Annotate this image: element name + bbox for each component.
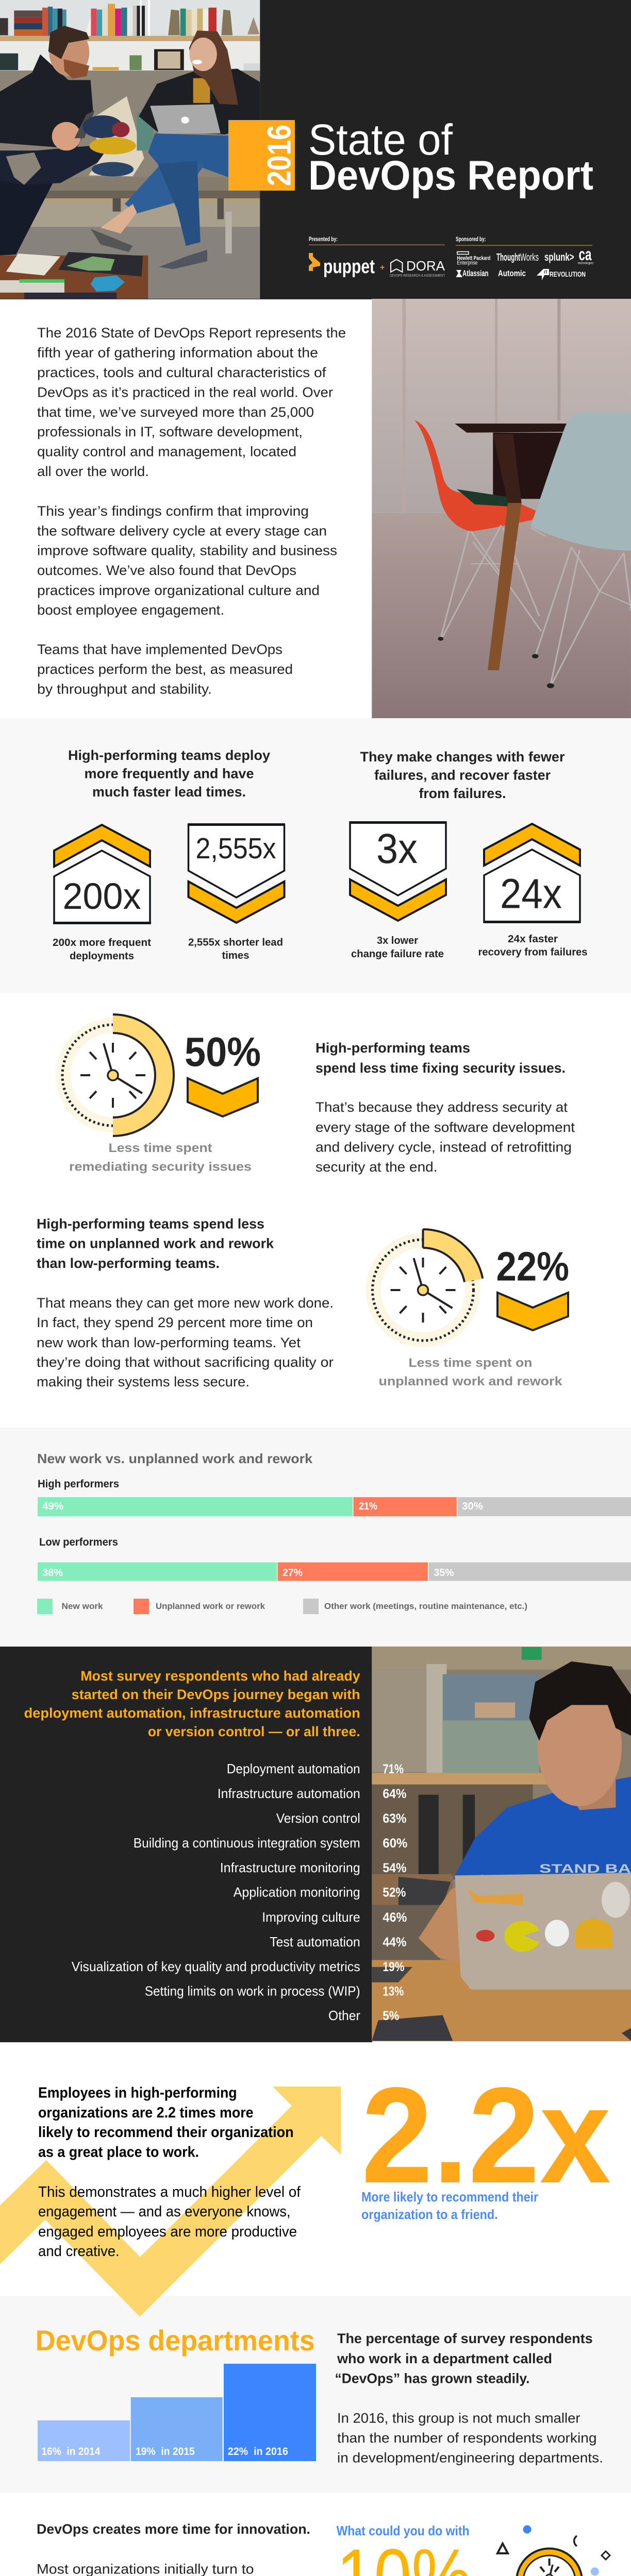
photo: engineer at laptop [372, 1647, 631, 2041]
list: percentages: 44% [383, 1935, 406, 1950]
intro text: practices, tools and cultural characteristics of [37, 365, 326, 380]
logo: puppet: puppet [323, 256, 375, 278]
panel: security [56, 1014, 575, 1175]
photo: chairs and table [372, 299, 631, 718]
text: engagement [38, 2085, 301, 2260]
sponsor logos: Enterprise [457, 260, 477, 266]
sponsor logos: Sponsored by: [456, 235, 486, 243]
title: State of [308, 115, 453, 164]
intro text: outcomes. We’ve also found that DevOps [37, 563, 296, 578]
text: unplanned work: making their systems less secure. [37, 1374, 250, 1389]
presented by logos [309, 235, 445, 278]
panel: DevOps journey [0, 1647, 631, 2042]
list: practices: Other [328, 2008, 360, 2023]
heading: fewer failures: from failures. [419, 786, 506, 801]
list: percentages: 54% [383, 1861, 406, 1875]
text: innovation [37, 2521, 310, 2576]
intro text: that time, we’ve surveyed more than 25,000 [37, 404, 314, 420]
captions: 200x more frequent [53, 937, 151, 948]
text: unplanned work: That means they can get more new work done. [37, 1295, 334, 1311]
logo: DORA: DORA [406, 258, 445, 274]
photo: two colleagues on a sofa [0, 0, 260, 299]
chart title: New work vs. unplanned work and rework [37, 1451, 313, 1466]
text: unplanned work: High-performing teams spend less [37, 1216, 264, 1231]
heading: Most survey respondents who had already [80, 1668, 360, 1684]
text: departments: In 2016, this group is not much smaller [337, 2410, 580, 2426]
legend: Other work (meetings, routine maintenance, etc.) [324, 1601, 527, 1611]
panel: engagement [0, 2059, 612, 2317]
intro text: quality control and management, located [37, 444, 296, 460]
text: departments: than the number of respondents working [337, 2430, 597, 2446]
list: percentages [383, 1762, 407, 2023]
heading: deploy more frequently: High-performing teams deploy [68, 748, 270, 763]
legend: Unplanned work or rework [156, 1601, 265, 1611]
sponsor logos: ca [578, 245, 592, 264]
list: practices: Improving culture [262, 1909, 360, 1925]
stat caption: organization to a friend. [361, 2207, 498, 2222]
captions: 24x faster [508, 934, 558, 945]
bar chart: high performers: High performers [38, 1478, 119, 1490]
list: practices [72, 1761, 360, 2023]
bar chart: low performers: 38% [42, 1567, 63, 1579]
panel: new work chart [0, 1428, 631, 1647]
panel: performance multipliers [0, 718, 631, 993]
text: unplanned work: new work than low-performing teams. Yet [37, 1335, 301, 1350]
text: engagement: as a great place to work. [38, 2144, 199, 2161]
badge: 200x [53, 825, 151, 924]
sponsor logos: Hewlett Packard [457, 256, 490, 262]
heading: started on their DevOps journey began with [72, 1687, 360, 1702]
intro text: improve software quality, stability and business [37, 543, 337, 558]
bar chart: departments: 19% in 2015 [136, 2446, 195, 2458]
intro text: practices improve organizational culture and [37, 583, 320, 598]
caption: unplanned work and rework [378, 1375, 562, 1388]
badge: 24x: 24x [500, 871, 562, 917]
intro text: This year’s findings confirm that improving [37, 503, 309, 519]
year tag: 2016: 2016 [261, 125, 298, 186]
text: departments: “DevOps” has grown steadily. [335, 2371, 530, 2386]
captions: recovery from failures [478, 947, 588, 958]
callout: 10% more: What could you do with [337, 2523, 470, 2538]
stat: 2.2x: 2.2x [361, 2059, 612, 2212]
captions [53, 934, 588, 962]
title [308, 115, 593, 199]
heading: or version control — or all three. [148, 1724, 360, 1739]
list: percentages: 52% [383, 1886, 406, 1900]
text: departments: The percentage of survey respondents [337, 2331, 593, 2346]
panel background: departments [0, 2296, 631, 2493]
legend [37, 1599, 527, 1614]
sponsor logos: Automic [498, 268, 526, 278]
bar chart: departments: 16% in 2014 [41, 2446, 101, 2458]
text: engagement: organizations are 2.2 times more [38, 2105, 254, 2121]
sponsor logos: Atlassian [462, 268, 489, 278]
caption [378, 1356, 562, 1388]
text: unplanned work: they’re doing that without sacrificing quality or [37, 1354, 334, 1370]
sponsor logos: technologies [578, 262, 593, 265]
intro text: practices perform the best, as measured [37, 662, 293, 677]
list: practices: Test automation [270, 1934, 360, 1950]
logo: puppet [309, 253, 375, 278]
panel: intro [37, 299, 631, 718]
intro text: fifth year of gathering information about the [37, 345, 318, 361]
arrow: rising zigzag [0, 2087, 341, 2317]
stat caption [361, 2189, 538, 2222]
bar chart: departments [38, 2364, 316, 2461]
presented by logos: + [380, 263, 385, 272]
legend: New work [62, 1601, 103, 1611]
text: engagement: This demonstrates a much higher level of [38, 2184, 301, 2200]
list: percentages: 64% [383, 1787, 406, 1801]
title: DevOps Report [308, 152, 593, 199]
text: security: and delivery cycle, instead of retrofitting [315, 1140, 572, 1155]
list: practices: Setting limits on work in process (WIP) [145, 1984, 360, 1999]
sponsor logos: REVOLUTION [550, 270, 586, 278]
list: practices: Visualization of key quality and productivity metrics [72, 1959, 360, 1974]
bar chart: low performers: 35% [434, 1567, 454, 1579]
bar chart: high performers: 21% [359, 1501, 377, 1512]
heading [24, 1668, 360, 1739]
text: departments: in development/engineering departments. [337, 2450, 603, 2466]
text: departments [335, 2331, 603, 2466]
intro text: Teams that have implemented DevOps [37, 642, 283, 657]
text: engagement: engagement — and as everyone knows, [38, 2204, 291, 2220]
captions: change failure rate [351, 948, 444, 960]
list: percentages: 63% [383, 1811, 406, 1826]
bar chart: low performers: 27% [283, 1567, 303, 1579]
logo: DORA [390, 258, 445, 278]
intro text: professionals in IT, software development, [37, 424, 303, 439]
text: security: every stage of the software development [315, 1120, 575, 1135]
bar chart: high performers [38, 1478, 631, 1516]
captions: 3x lower [377, 935, 418, 946]
captions: times [222, 950, 250, 961]
logo: DORA: DEVOPS RESEARCH & ASSESSMENT [390, 274, 445, 278]
list: practices: Version control [276, 1810, 360, 1826]
heading: fewer failures: They make changes with fewer [360, 749, 565, 765]
text: unplanned work [37, 1216, 334, 1389]
list: percentages: 60% [383, 1836, 407, 1851]
intro text: The 2016 State of DevOps Report represents the [37, 325, 346, 341]
text: unplanned work: than low-performing teams. [37, 1256, 220, 1271]
photo: engineer at laptop: STAND BA [539, 1862, 631, 1876]
sponsor logos: splunk> [544, 251, 574, 263]
panel: DevOps departments [36, 2324, 603, 2466]
list: percentages: 5% [383, 2009, 399, 2023]
heading: deploy more frequently: much faster lead times. [92, 784, 246, 800]
heading: fewer failures: failures, and recover faster [374, 768, 551, 783]
text: unplanned work: In fact, they spend 29 percent more time on [37, 1315, 313, 1330]
badge: 24x [484, 824, 580, 923]
clock: 22% [366, 1229, 483, 1347]
caption: Less time spent [108, 1141, 212, 1155]
clock: 50% [56, 1014, 174, 1136]
text: security: High-performing teams [315, 1040, 470, 1056]
list: practices: Building a continuous integration system [134, 1835, 360, 1851]
caption: Less time spent on [408, 1356, 532, 1370]
list: percentages: 19% [383, 1960, 404, 1974]
caption [69, 1141, 252, 1174]
captions: 2,555x shorter lead [188, 937, 283, 948]
badge: 2,555x [188, 823, 285, 923]
presented by logos: Presented by: [309, 235, 338, 243]
heading: deploy more frequently [68, 748, 270, 800]
sponsor logos: IT [544, 270, 547, 275]
list: percentages: 13% [383, 1985, 404, 1999]
text: engagement: likely to recommend their organization [38, 2124, 294, 2141]
intro text: all over the world. [37, 464, 149, 479]
badge: 3x: 3x [376, 825, 418, 872]
captions: deployments [70, 951, 134, 962]
bar chart: low performers [38, 1536, 631, 1581]
intro text: DevOps as it’s practiced in the real world. Over [37, 384, 333, 400]
text: engagement: engaged employees are more productive [38, 2224, 297, 2240]
heading: DevOps departments [36, 2324, 315, 2357]
intro text: the software delivery cycle at every stage can [37, 523, 327, 539]
badge: 3x [350, 821, 446, 921]
text: engagement: and creative. [38, 2243, 120, 2260]
list: practices: Application monitoring [234, 1885, 360, 1900]
panel: innovation [37, 2521, 614, 2576]
stat: 50%: 50% [185, 1029, 261, 1075]
text: security: security at the end. [315, 1159, 437, 1175]
intro text: by throughput and stability. [37, 681, 212, 697]
icon: box with clock [481, 2526, 614, 2576]
bar chart: departments: 22% in 2016 [228, 2446, 288, 2458]
chevron down [188, 1078, 258, 1116]
panel: unplanned work [37, 1216, 569, 1389]
text: innovation: DevOps creates more time for innovation. [37, 2521, 310, 2537]
heading: fewer failures [360, 749, 565, 801]
bar chart: high performers: 30% [462, 1501, 483, 1512]
text: security: spend less time fixing security issues. [315, 1060, 566, 1076]
sponsor logos: Works [520, 252, 539, 263]
bar chart: low performers: Low performers [39, 1536, 118, 1548]
list: practices: Deployment automation [227, 1761, 360, 1776]
intro text [37, 325, 346, 697]
bar chart: high performers: 49% [42, 1501, 63, 1512]
stat: 22%: 22% [496, 1244, 569, 1289]
list: percentages: 46% [383, 1910, 407, 1925]
list: percentages: 71% [383, 1762, 404, 1776]
year tag: 2016 [228, 120, 298, 191]
badge: 200x: 200x [63, 876, 141, 917]
list: practices: Infrastructure monitoring [220, 1860, 360, 1875]
text: engagement: Employees in high-performing [38, 2085, 237, 2102]
list: practices: Infrastructure automation [218, 1786, 360, 1801]
text: departments: who work in a department called [337, 2351, 552, 2366]
heading: deploy more frequently: more frequently and have [85, 766, 254, 781]
caption: remediating security issues [69, 1160, 252, 1174]
sponsor logos [456, 235, 593, 280]
chevron down [497, 1293, 568, 1330]
intro text: boost employee engagement. [37, 602, 224, 618]
stat caption: More likely to recommend their [361, 2189, 538, 2205]
heading: deployment automation, infrastructure automation [24, 1705, 360, 1721]
text: security: That’s because they address security at [315, 1099, 568, 1115]
header banner [0, 0, 631, 299]
sponsor logos: Thought [496, 252, 520, 263]
text: security [315, 1040, 575, 1175]
badge: 2,555x: 2,555x [196, 832, 276, 865]
text: unplanned work: time on unplanned work and rework [37, 1235, 274, 1251]
